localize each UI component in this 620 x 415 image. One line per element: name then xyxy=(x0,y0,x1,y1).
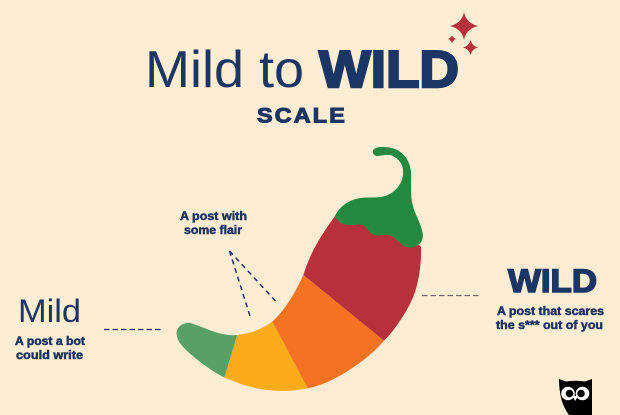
label: flair description: some flair xyxy=(184,225,243,237)
label: flair description: A post with xyxy=(180,211,247,223)
label: wild heading: WILD xyxy=(508,263,597,299)
connector: mild dashes xyxy=(104,328,162,330)
icon: owl logo xyxy=(559,379,592,415)
label: flair description xyxy=(180,211,247,237)
pepper stem and cap xyxy=(335,147,423,248)
pepper segment: mild green tip xyxy=(176,322,238,378)
chili pepper xyxy=(160,140,460,404)
label: mild description xyxy=(15,336,85,362)
title: Mild to xyxy=(145,41,304,99)
connector: wild dashes xyxy=(422,294,481,296)
label: wild description: the s*** out of you xyxy=(496,320,603,332)
title xyxy=(145,41,459,99)
pepper segment: red xyxy=(303,216,422,340)
pepper segment: yellow xyxy=(224,322,308,391)
label: wild description xyxy=(496,306,604,332)
label: mild description: A post a bot xyxy=(15,336,85,348)
subtitle: SCALE xyxy=(257,104,347,128)
title: WILD xyxy=(319,41,459,99)
pepper segment: orange xyxy=(272,275,384,388)
label: mild description: could write xyxy=(16,350,83,362)
label: mild heading: Mild xyxy=(18,293,81,329)
icon: sparkles xyxy=(448,12,478,55)
connector: flair dashes xyxy=(230,251,276,316)
label: wild description: A post that scares xyxy=(497,306,604,318)
